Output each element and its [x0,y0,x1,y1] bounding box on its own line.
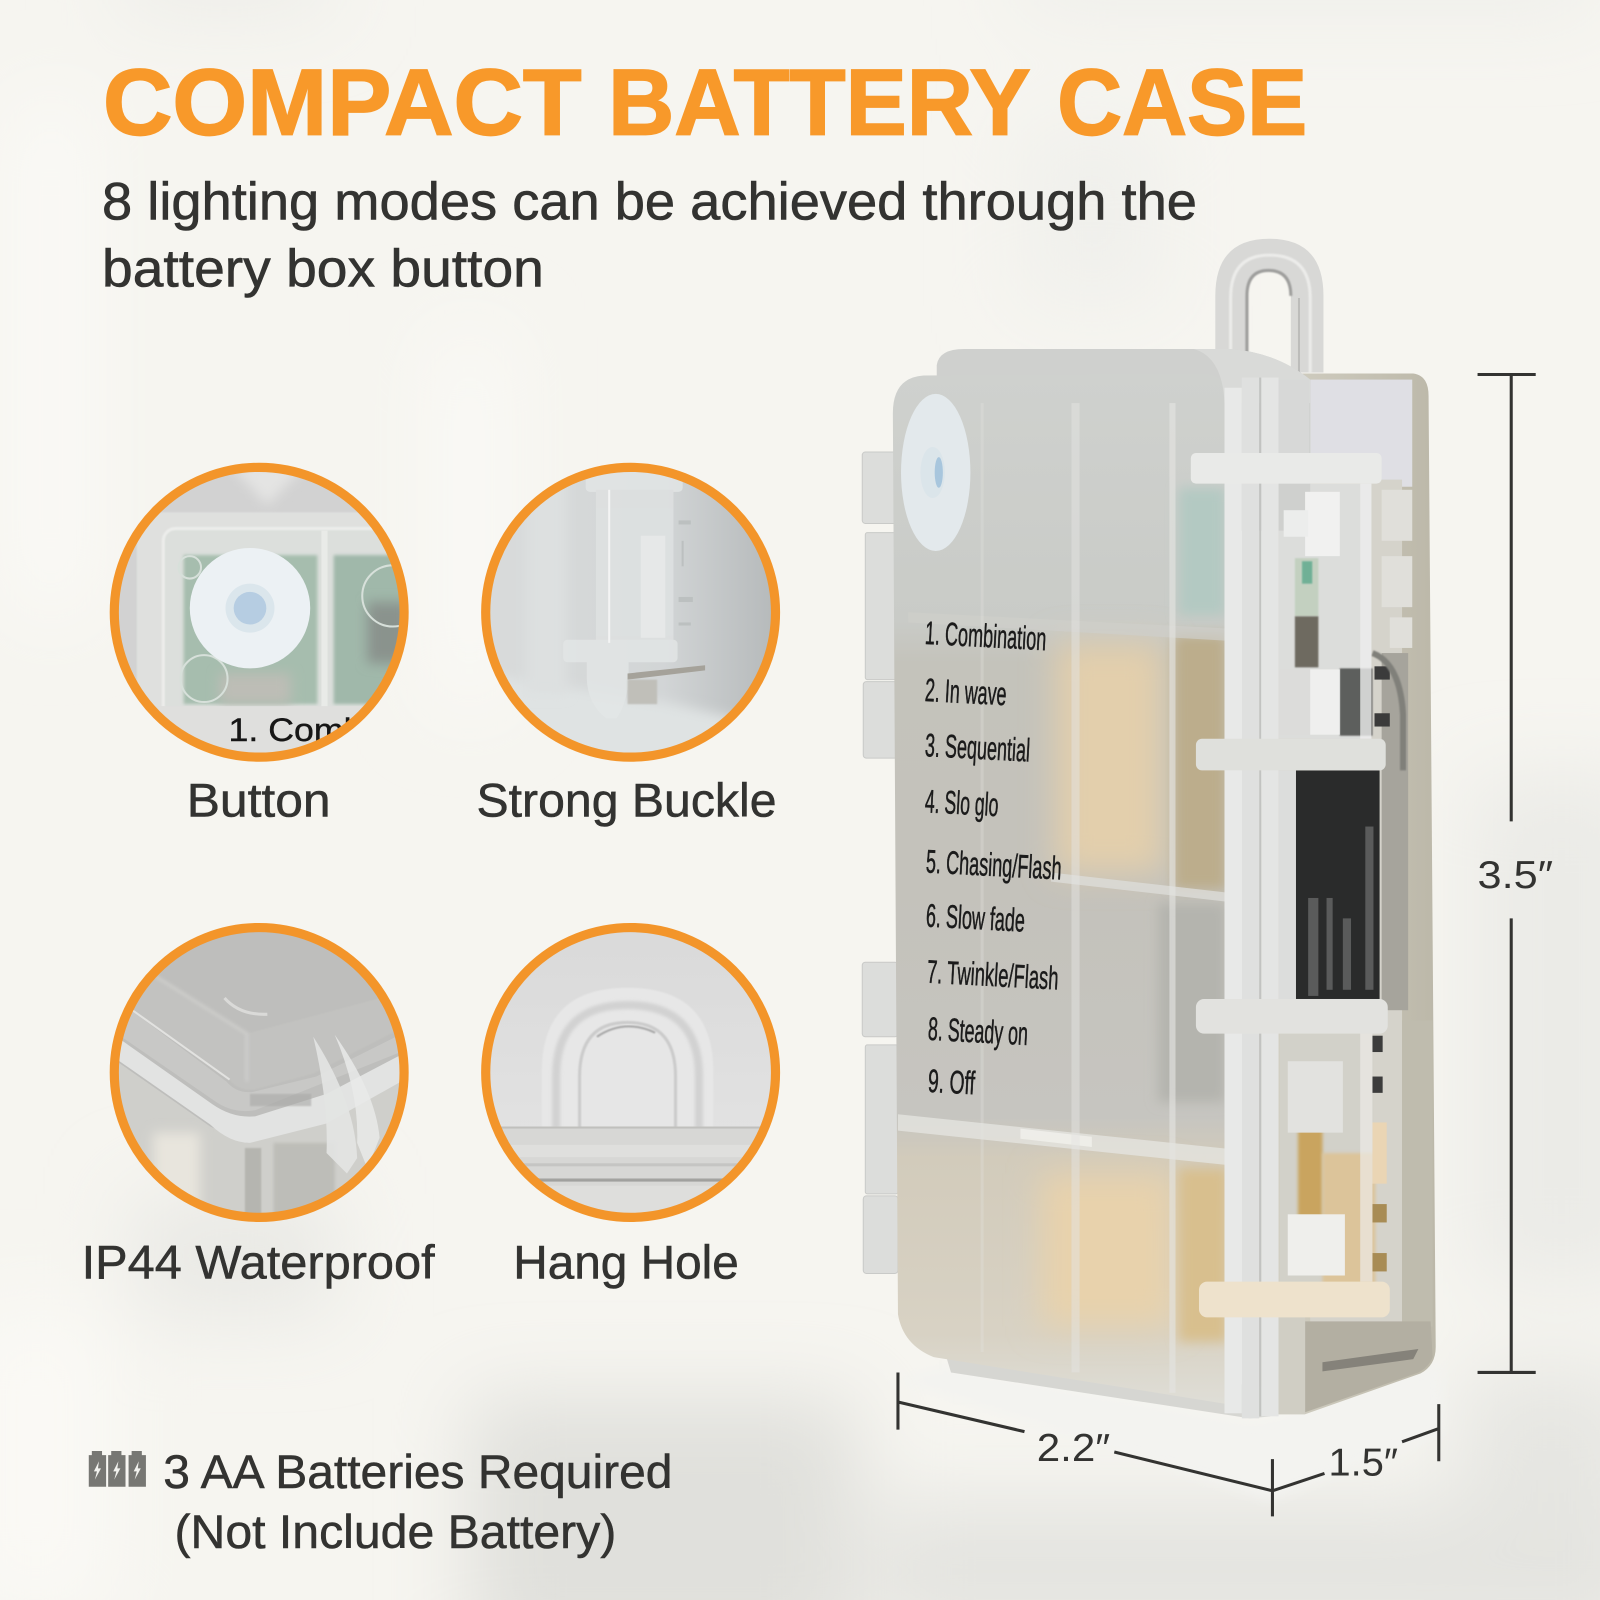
dimension: width 2.2 inches: 2.2″ [1037,1427,1110,1470]
case body and internals [1255,373,1436,1414]
label: hang hole: Hang Hole [513,1237,739,1289]
mode list printed on case: 7. Twinkle/Flash [926,953,1060,997]
subtitle [102,172,1197,299]
mode list printed on case: 1. Combination [924,614,1047,657]
mode list printed on case: 6. Slow fade [925,897,1026,939]
hang loop [1215,239,1323,372]
detail circle: button [110,462,409,762]
mode list printed on case: 2. In wave [924,671,1008,712]
lid back edge [937,349,1310,531]
battery case product [862,239,1443,1500]
icon: three batteries [89,1451,146,1487]
battery requirement note: (Not Include Battery) [174,1506,616,1558]
left hinges [862,452,898,1273]
mode list printed on case: 4. Slo glo [924,782,999,823]
clear frame lower [1280,1033,1373,1283]
detail circle: IP44 waterproof [110,923,409,1222]
subtitle: battery box button [102,240,544,299]
front face [893,373,1240,1406]
side panels [1382,490,1412,648]
dark battery [1296,770,1380,999]
buckles [1191,453,1390,1317]
title [103,50,1307,155]
battery requirement note [163,1446,672,1558]
title: CASE [1057,50,1307,155]
lower clear wall [119,1063,399,1212]
mode list printed on case: 8. Steady on [927,1010,1029,1052]
case bottom lip [944,1349,1270,1418]
detail circle: strong buckle [480,459,786,776]
lid side faces [130,977,400,1090]
battery requirement note: 3 AA Batteries Required [163,1446,672,1498]
boss arc [224,998,267,1014]
mode list printed on case: 9. Off [927,1062,977,1101]
dimension: depth 1.5 inches: 1.5″ [1329,1442,1398,1485]
white gasket [119,1041,400,1143]
dimension: height 3.5 inches: 3.5″ [1478,854,1553,897]
grey groove [124,1012,398,1111]
label: button: Button [187,774,331,826]
vertical ribs [981,403,1176,1393]
label: IP44 waterproof: IP44 Waterproof [82,1237,436,1289]
side ridge rails [1194,349,1372,1418]
clear straps [313,1037,357,1173]
detail circle: hang hole [480,918,786,1239]
title: COMPACT [103,50,582,155]
mode list printed on case: 5. Chasing/Flash [925,842,1063,887]
dimension: height 3.5 inches [1478,374,1553,1372]
dimension: width 2.2 inches [898,1372,1272,1516]
front face light patches [898,488,1230,1342]
mode list printed on case: 3. Sequential [924,726,1031,769]
title: BATTERY [608,50,1031,155]
label: strong buckle: Strong Buckle [477,774,777,826]
detail circle: button: 1. Combi [229,711,371,748]
mode list printed on case [924,614,1063,1101]
clear frame upper [1279,484,1371,739]
push button [901,394,970,551]
case reflection [898,1362,1443,1500]
dimension: depth 1.5 inches [1272,1404,1439,1491]
subtitle: 8 lighting modes can be achieved through the [102,172,1197,231]
